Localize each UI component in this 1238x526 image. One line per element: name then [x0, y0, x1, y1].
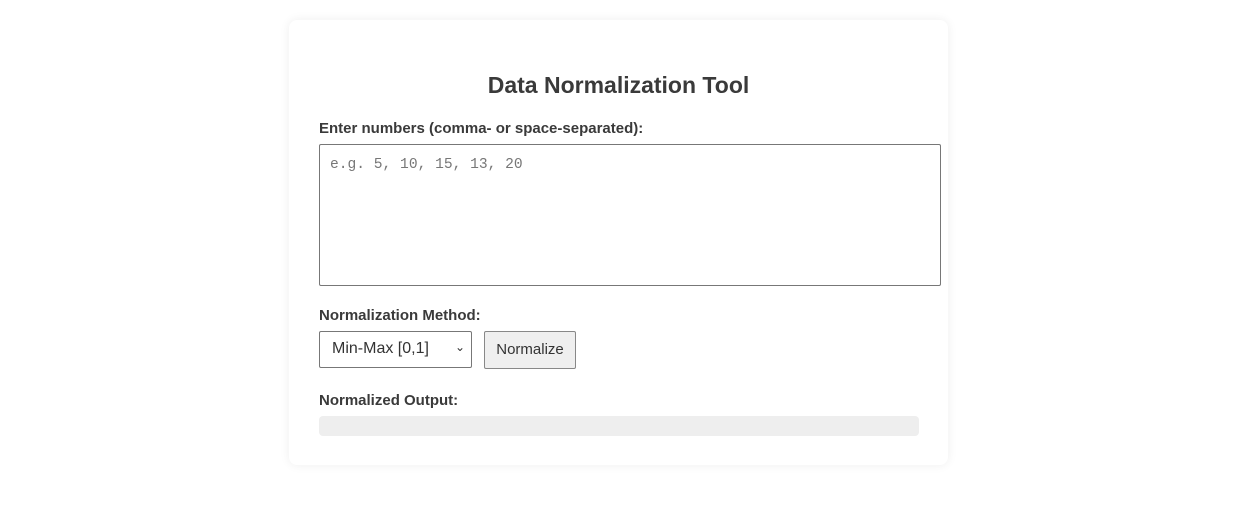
label: input: Enter numbers (comma- or space-separated):: [319, 120, 643, 137]
label: method: Normalization Method:: [319, 307, 481, 324]
textarea: [319, 144, 941, 286]
select: ⌄: [455, 340, 465, 354]
title: Data Normalization Tool: [488, 72, 749, 98]
select: [319, 331, 472, 368]
select: Min-Max [0,1]: [332, 340, 429, 357]
panel: tool card: [289, 20, 948, 465]
output box: [319, 416, 919, 436]
button: Normalize: [496, 341, 564, 358]
button: [484, 331, 576, 369]
label: output: Normalized Output:: [319, 392, 458, 409]
textarea: e.g. 5, 10, 15, 13, 20: [330, 157, 523, 173]
